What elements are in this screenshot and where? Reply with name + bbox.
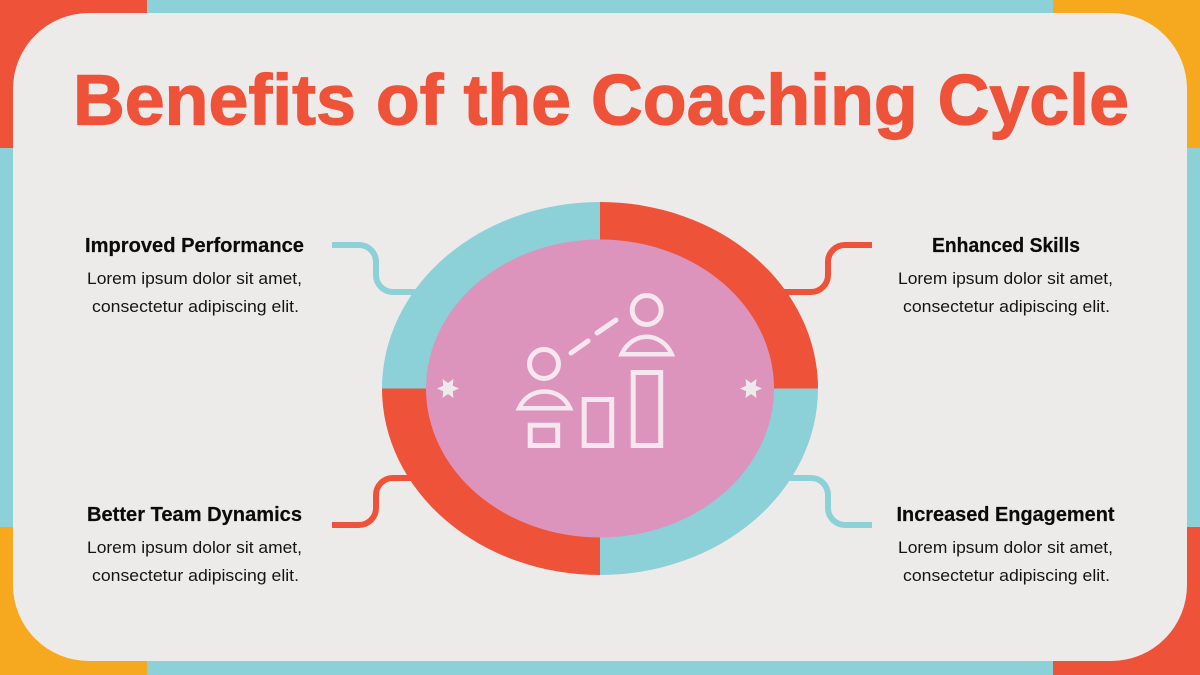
text block: increased engagement: Increased Engagement (896, 503, 1115, 526)
text block: better team dynamics (87, 503, 302, 585)
text block: enhanced skills: consectetur adipiscing elit. (903, 297, 1110, 316)
text block: improved performance: Lorem ipsum dolor sit amet, (87, 269, 302, 288)
text block: enhanced skills: Enhanced Skills (932, 234, 1080, 257)
text block: improved performance (85, 234, 304, 316)
text block: increased engagement: Lorem ipsum dolor sit amet, (898, 538, 1113, 557)
connector: increased engagement (782, 478, 872, 525)
connector: better team dynamics (332, 478, 418, 525)
icon: right star (740, 379, 762, 398)
ring segment: bottom left (382, 388, 600, 575)
text block: better team dynamics: Better Team Dynamics (87, 503, 302, 526)
ring segment: bottom right (600, 388, 818, 575)
ring segment: top left (382, 202, 600, 388)
text block: better team dynamics: consectetur adipiscing elit. (92, 566, 299, 585)
text block: increased engagement (896, 503, 1115, 585)
text block: enhanced skills: Lorem ipsum dolor sit amet, (898, 269, 1113, 288)
connector: enhanced skills (782, 245, 872, 292)
inner pink ellipse (426, 240, 774, 538)
title: Benefits of the Coaching Cycle (73, 62, 1129, 140)
central ring (382, 202, 818, 575)
text block: enhanced skills (898, 234, 1113, 316)
text block: improved performance: consectetur adipiscing elit. (92, 297, 299, 316)
icon: left star (437, 379, 459, 398)
text block: better team dynamics: Lorem ipsum dolor sit amet, (87, 538, 302, 557)
text block: improved performance: Improved Performance (85, 234, 304, 257)
icon: coaching growth (519, 296, 672, 446)
text block: increased engagement: consectetur adipiscing elit. (903, 566, 1110, 585)
connector: improved performance (332, 245, 418, 292)
ring segment: top right (600, 202, 818, 388)
